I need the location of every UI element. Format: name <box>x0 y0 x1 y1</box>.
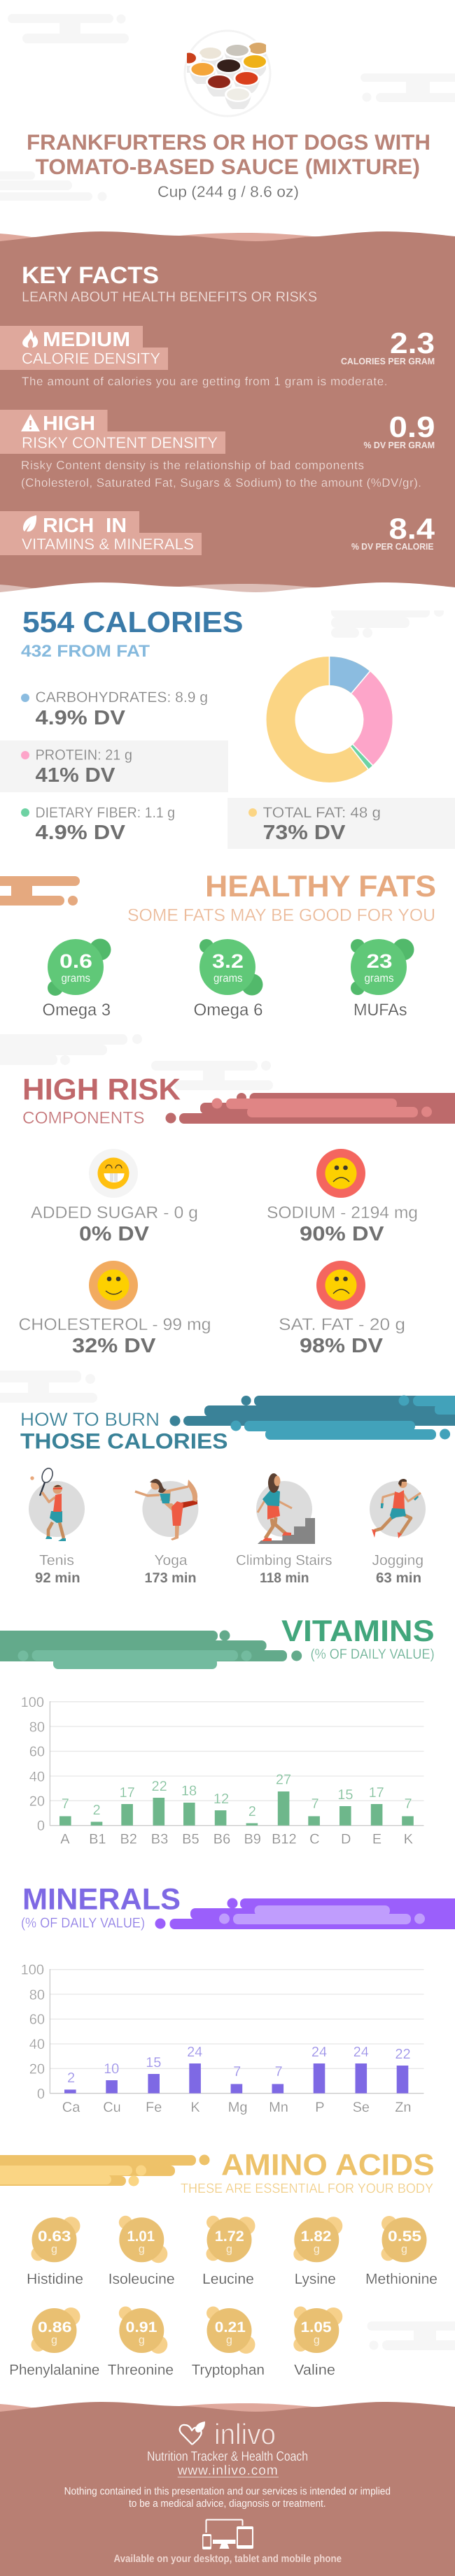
heading: vitamins: VITAMINS <box>281 1615 435 1648</box>
amino acid: histidine <box>27 2217 83 2287</box>
risk item: sodium: 90% DV <box>300 1223 384 1245</box>
risk item: sodium: SODIUM - 2194 mg <box>267 1203 418 1222</box>
bar chart: vitamins: E <box>372 1832 382 1847</box>
stat: 8.4 % dv per calorie: 8.4 <box>389 512 435 545</box>
risk item: saturated fat <box>279 1261 405 1357</box>
callout: rich in vitamins and minerals: RICH IN <box>43 515 127 537</box>
bar chart: minerals: 22 <box>395 2047 411 2062</box>
legend: total fat: TOTAL FAT: 48 g <box>263 805 381 821</box>
subheading: THESE ARE ESSENTIAL FOR YOUR BODY <box>181 2181 433 2196</box>
risk item: saturated fat: SAT. FAT - 20 g <box>279 1315 405 1334</box>
risk item: cholesterol: CHOLESTEROL - 99 mg <box>18 1315 211 1334</box>
risk item: added sugar <box>31 1149 198 1245</box>
metric: omega 6: grams <box>214 973 242 985</box>
bar chart: minerals: 20 <box>29 2062 45 2077</box>
risk item: cholesterol: 32% DV <box>72 1335 156 1357</box>
bar chart: vitamins: B6 <box>214 1832 230 1847</box>
metric: mufas: grams <box>364 973 393 985</box>
amino acid: valine: 1.05 <box>301 2319 332 2335</box>
amino acid: lysine: Lysine <box>295 2271 336 2287</box>
bar chart: vitamins: 22 <box>151 1779 167 1794</box>
bar chart: vitamins: B9 <box>244 1832 261 1847</box>
metric: omega 6 <box>193 939 263 1019</box>
text: calorie density description: The amount of calories you are getting from 1 gram is moderate. <box>22 375 388 388</box>
legend: protein <box>0 740 228 792</box>
bar chart: minerals: K <box>190 2100 200 2115</box>
amino acid: isoleucine: g <box>139 2243 145 2256</box>
bar chart: minerals: 40 <box>29 2037 45 2052</box>
bar chart: vitamins: 18 <box>181 1784 197 1799</box>
amino acid: valine: Valine <box>294 2362 335 2378</box>
bar chart: minerals: 80 <box>29 1987 45 2003</box>
bar chart: vitamins: B1 <box>89 1832 106 1847</box>
bar chart: vitamins: B5 <box>182 1832 200 1847</box>
risk item: saturated fat: 98% DV <box>300 1335 384 1357</box>
icon: devices <box>202 2519 253 2549</box>
bar chart: vitamins: 15 <box>337 1787 354 1803</box>
bar chart: minerals: 24 <box>312 2045 327 2060</box>
heading: minerals: MINERALS <box>22 1882 181 1916</box>
amino acid: histidine: g <box>51 2243 57 2256</box>
amino acid: methionine <box>365 2216 438 2287</box>
callout: rich in vitamins and minerals <box>0 511 202 555</box>
subheading: 432 from fat: 432 FROM FAT <box>21 642 150 661</box>
heading: how to burn those calories: HOW TO BURN <box>20 1409 160 1430</box>
metric: omega 3 <box>42 938 111 1019</box>
bar chart: vitamins: 2 <box>92 1803 101 1818</box>
bar chart: vitamins: B3 <box>151 1832 168 1847</box>
risk item: cholesterol <box>18 1261 211 1357</box>
amino acid: leucine: g <box>226 2243 232 2256</box>
heading: key facts: KEY FACTS <box>22 262 159 289</box>
stat: 0.9 % dv per gram: 0.9 <box>389 410 435 443</box>
subheading: percent of daily value: (% OF DAILY VALUE) <box>21 1916 145 1931</box>
title <box>27 130 430 179</box>
legend: carbohydrates <box>21 689 208 729</box>
callout: medium calorie density: CALORIE DENSITY <box>22 350 160 367</box>
bar chart: vitamins: 12 <box>214 1791 229 1807</box>
activity: tennis: 92 min <box>35 1570 80 1586</box>
amino acid: leucine: 1.72 <box>215 2228 244 2245</box>
amino acid: lysine <box>293 2217 342 2287</box>
activity: tennis: Tenis <box>39 1552 74 1568</box>
panel: footer <box>0 2402 455 2576</box>
amino acid: lysine: 1.82 <box>301 2228 332 2245</box>
bar chart: minerals: 15 <box>146 2055 161 2070</box>
bar chart: minerals: Mn <box>269 2100 288 2115</box>
bar chart: vitamins: K <box>404 1832 414 1847</box>
bar chart: vitamins: 7 <box>62 1796 69 1812</box>
amino acid: tryptophan: g <box>226 2334 232 2347</box>
legend: total fat <box>227 798 455 849</box>
bar chart: vitamins: D <box>341 1832 351 1847</box>
icon: leaf <box>23 515 36 531</box>
callout: high risky content density: RISKY CONTENT DENSITY <box>22 434 218 452</box>
text: risky content description <box>21 459 421 489</box>
legend: dietary fiber <box>21 805 175 844</box>
risk item: added sugar: 0% DV <box>79 1223 150 1245</box>
metric: omega 6: Omega 6 <box>193 1001 263 1019</box>
legend: carbohydrates: CARBOHYDRATES: 8.9 g <box>35 689 208 706</box>
logo wordmark: inlivo <box>214 2418 276 2450</box>
bar chart: minerals: P <box>315 2100 325 2115</box>
legend: carbohydrates: 4.9% DV <box>35 707 126 729</box>
bar chart: vitamins: 0 <box>37 1819 45 1834</box>
bar chart: minerals <box>21 1963 424 2115</box>
donut chart: macronutrients <box>281 657 378 769</box>
bar chart: minerals: 0 <box>37 2087 45 2102</box>
amino acid: valine: g <box>314 2334 320 2347</box>
callout: rich in vitamins and minerals: VITAMINS & MINERALS <box>22 536 194 552</box>
callout: high risky content density: HIGH <box>43 413 95 435</box>
heading: high risk: HIGH RISK <box>22 1073 181 1106</box>
bar chart: vitamins: 17 <box>369 1785 384 1801</box>
stat: 2.3 calories per gram <box>341 327 435 366</box>
amino acid: tryptophan: 0.21 <box>215 2319 246 2335</box>
callout: medium calorie density <box>0 326 168 370</box>
amino acid: methionine: g <box>401 2243 407 2256</box>
stat: 2.3 calories per gram: 2.3 <box>390 327 435 359</box>
icon: bowls of sauces photo <box>176 31 270 116</box>
subheading: percent of daily value: (% OF DAILY VALUE) <box>311 1647 435 1662</box>
metric: omega 3: 0.6 <box>59 950 92 972</box>
text: risky content description: (Cholesterol, Saturated Fat, Sugars & Sodium) to the amount (%DV/gr). <box>21 476 421 489</box>
title: FRANKFURTERS OR HOT DOGS WITH <box>27 130 430 155</box>
bar chart: vitamins: B2 <box>120 1832 137 1847</box>
heading: healthy fats: HEALTHY FATS <box>205 870 436 903</box>
subheading: LEARN ABOUT HEALTH BENEFITS OR RISKS <box>22 289 317 305</box>
icon: flame <box>22 329 38 348</box>
amino acid: phenylalanine: Phenylalanine <box>9 2362 99 2378</box>
amino acid: threonine: Threonine <box>108 2362 174 2378</box>
amino acid: isoleucine: 1.01 <box>127 2228 155 2245</box>
bar chart: vitamins: 7 <box>311 1796 319 1812</box>
bar chart: minerals: Cu <box>103 2100 121 2115</box>
bar chart: vitamins: 7 <box>404 1796 412 1812</box>
bar chart: minerals: 60 <box>29 2012 45 2028</box>
amino acid: isoleucine: Isoleucine <box>108 2271 175 2287</box>
legend: protein: PROTEIN: 21 g <box>35 747 132 764</box>
bar chart: minerals: 7 <box>233 2064 241 2080</box>
bar chart: vitamins: C <box>309 1832 320 1847</box>
stat: 8.4 % dv per calorie: % DV PER CALORIE <box>351 541 434 552</box>
activity: jogging: 63 min <box>376 1570 421 1586</box>
legend: protein: 41% DV <box>35 764 115 787</box>
heading: 554 calories: 554 CALORIES <box>22 606 244 638</box>
metric: omega 3: grams <box>62 973 90 985</box>
bar chart: minerals: Mg <box>228 2100 247 2115</box>
heading: how to burn those calories: THOSE CALORIES <box>20 1429 228 1453</box>
callout: high risky content density <box>0 410 225 454</box>
tagline: Nutrition Tracker & Health Coach <box>147 2449 308 2464</box>
amino acid: methionine: 0.55 <box>388 2228 421 2245</box>
bar chart: vitamins: 17 <box>119 1785 135 1801</box>
subheading: components: COMPONENTS <box>22 1109 144 1127</box>
activity: yoga <box>135 1479 198 1586</box>
bar chart: minerals: 100 <box>21 1963 44 1978</box>
bar chart: minerals: 24 <box>187 2045 202 2060</box>
bar chart: minerals: 7 <box>274 2064 283 2080</box>
activity: jogging: Jogging <box>372 1552 424 1568</box>
activity: climbing stairs: Climbing Stairs <box>236 1552 332 1568</box>
disclaimer: Nothing contained in this presentation and our services is intended or implied <box>64 2485 391 2498</box>
amino acid: histidine: Histidine <box>27 2271 83 2287</box>
bar chart: vitamins <box>21 1695 424 1847</box>
stat: 8.4 % dv per calorie <box>351 512 435 552</box>
amino acid: isoleucine <box>108 2216 175 2287</box>
activity: yoga: 173 min <box>144 1570 196 1586</box>
title: TOMATO-BASED SAUCE (MIXTURE) <box>35 155 420 179</box>
metric: mufas: 23 <box>367 950 392 972</box>
bar chart: vitamins: 100 <box>21 1695 44 1710</box>
amino acid: phenylalanine <box>9 2307 99 2378</box>
icon: warning triangle <box>21 414 40 431</box>
bar chart: vitamins: 60 <box>29 1745 45 1760</box>
bar chart: vitamins: 80 <box>29 1720 45 1736</box>
disclaimer: to be a medical advice, diagnosis or treatment. <box>129 2498 326 2510</box>
bar chart: vitamins: B12 <box>272 1832 297 1847</box>
amino acid: leucine <box>202 2216 255 2287</box>
risk item: sodium <box>267 1149 418 1245</box>
availability note: Available on your desktop, tablet and mobile phone <box>113 2553 342 2565</box>
subheading: SOME FATS MAY BE GOOD FOR YOU <box>127 906 435 925</box>
website: www.inlivo.com <box>177 2463 278 2478</box>
bar chart: vitamins: A <box>60 1832 70 1847</box>
bar chart: minerals: 24 <box>354 2045 369 2060</box>
bar chart: vitamins: 27 <box>276 1773 291 1788</box>
bar chart: minerals: 10 <box>104 2061 119 2077</box>
bar chart: vitamins: 20 <box>29 1794 45 1810</box>
text: risky content description: Risky Content density is the relationship of bad components <box>21 459 364 472</box>
bar chart: minerals: Ca <box>62 2100 80 2115</box>
bar chart: minerals: Fe <box>146 2100 162 2115</box>
activity: climbing stairs: 118 min <box>260 1570 309 1586</box>
icon: inlivo heart logo <box>180 2421 205 2445</box>
callout: medium calorie density: MEDIUM <box>43 329 130 351</box>
heading: how to burn those calories <box>20 1409 228 1453</box>
activity: jogging <box>370 1479 426 1586</box>
activity: climbing stairs <box>236 1473 332 1586</box>
disclaimer <box>64 2485 391 2510</box>
amino acid: tryptophan: Tryptophan <box>192 2362 265 2378</box>
legend: total fat: 73% DV <box>263 822 346 844</box>
stat: 0.9 % dv per gram <box>364 410 435 450</box>
amino acid: tryptophan <box>192 2306 265 2378</box>
metric: omega 3: Omega 3 <box>42 1001 111 1019</box>
activity: tennis <box>29 1467 85 1586</box>
stat: 0.9 % dv per gram: % DV PER GRAM <box>364 440 435 450</box>
panel: key facts <box>0 231 455 610</box>
metric: mufas: MUFAs <box>354 1001 407 1019</box>
bar chart: minerals: 2 <box>67 2070 75 2086</box>
amino acid: histidine: 0.63 <box>38 2228 71 2245</box>
activity: yoga: Yoga <box>154 1552 188 1568</box>
bar chart: minerals: Zn <box>395 2100 412 2115</box>
amino acid: lysine: g <box>314 2243 320 2256</box>
risk item: added sugar: ADDED SUGAR - 0 g <box>31 1203 198 1222</box>
amino acid: methionine: Methionine <box>365 2271 438 2287</box>
amino acid: valine <box>293 2306 342 2378</box>
bar chart: minerals: Se <box>353 2100 370 2115</box>
amino acid: leucine: Leucine <box>202 2271 254 2287</box>
bar chart: vitamins: 2 <box>248 1804 256 1819</box>
heading: amino acids: AMINO ACIDS <box>221 2148 435 2182</box>
legend: dietary fiber: 4.9% DV <box>35 822 126 844</box>
amino acid: phenylalanine: 0.86 <box>38 2319 71 2335</box>
stat: 2.3 calories per gram: CALORIES PER GRAM <box>341 356 435 366</box>
metric: mufas <box>351 938 414 1019</box>
bar chart: vitamins: 40 <box>29 1769 45 1784</box>
amino acid: phenylalanine: g <box>51 2334 57 2347</box>
amino acid: threonine <box>108 2306 174 2378</box>
metric: omega 6: 3.2 <box>212 950 244 972</box>
legend: dietary fiber: DIETARY FIBER: 1.1 g <box>35 805 175 821</box>
serving size: Cup (244 g / 8.6 oz) <box>158 183 299 200</box>
amino acid: threonine: g <box>139 2334 145 2347</box>
amino acid: threonine: 0.91 <box>126 2319 158 2335</box>
